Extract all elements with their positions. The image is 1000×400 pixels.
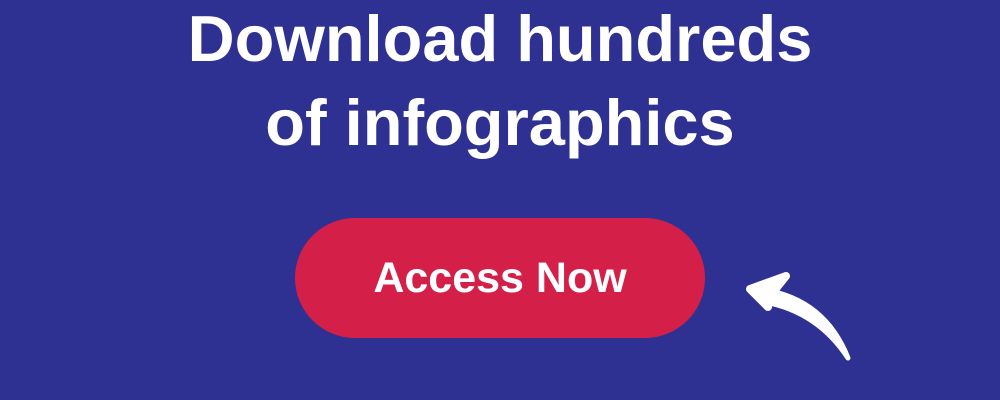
title: [188, 2, 812, 159]
title: Download hundreds: [188, 2, 812, 75]
button: Access Now: Access Now: [373, 254, 627, 302]
title: of infographics: [265, 86, 735, 159]
button: Access Now: [295, 218, 705, 338]
